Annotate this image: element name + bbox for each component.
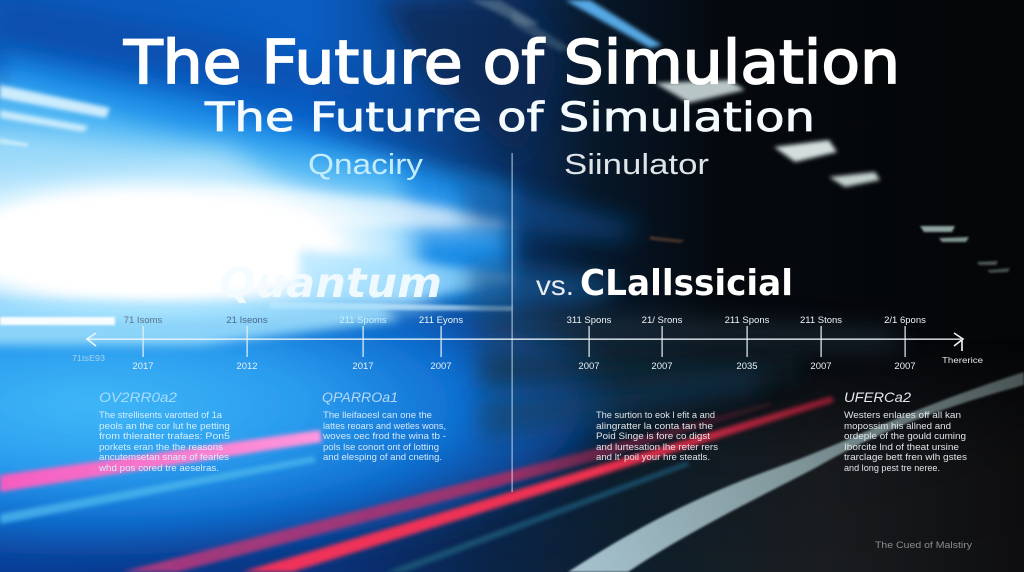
text block: UFERCa2: and long pest tre neree. [844, 463, 940, 474]
timeline labels above: 21/ Srons [642, 315, 683, 326]
timeline labels above: 311 Spons [567, 315, 612, 326]
timeline [72, 315, 983, 372]
timeline labels above: 71 Isoms [124, 315, 163, 326]
text block: OV2RR0a2 [98, 389, 230, 474]
timeline years below: 2007 [810, 361, 832, 372]
text block: QPARROa1: and elesping of and cneting. [323, 452, 442, 463]
timeline years below: 2012 [236, 361, 258, 372]
text block: QPARROa1: pols lse conort ont of lotting [323, 442, 439, 453]
text block: UFERCa2: mopossim his allned and [844, 421, 951, 432]
column heading: Qnaciry: Qnaciry [308, 149, 424, 181]
heading: vs. Classical: vs. [536, 270, 574, 301]
timeline end labels: 71tsE93 [72, 353, 105, 363]
text block: right center: alingratter la conta tan the [596, 421, 713, 432]
text block: OV2RR0a2: ancutemsetan snare of fearles [99, 452, 229, 463]
timeline labels above: 211 Stons [800, 315, 842, 326]
timeline labels above: 2/1 6pons [884, 315, 926, 326]
text block: QPARROa1: woves oec frod the wina tb - [322, 431, 446, 442]
timeline years below: 2007 [894, 361, 916, 372]
text block: OV2RR0a2: from thleratter trafaes: Pon5 [99, 431, 230, 442]
text block: UFERCa2: ordeple of the gould cuming [844, 431, 966, 442]
text block: right center [596, 410, 718, 463]
footer credit: The Cued of Malstiry [875, 540, 972, 551]
text block: UFERCa2 [844, 389, 967, 474]
heading: Quantum: Quantum [219, 259, 442, 307]
title: The Future of Simulation [123, 28, 900, 98]
arrow: right [954, 333, 963, 351]
timeline years below [132, 361, 916, 372]
timeline years below: 2017 [352, 361, 374, 372]
timeline ticks [142, 326, 906, 357]
text block: QPARROa1 [322, 389, 446, 463]
timeline years below: 2007 [430, 361, 452, 372]
text block: right center: and lurtesation lhe reter rers [596, 442, 718, 453]
text block: UFERCa2: trarclage bett fren wlh gstes [844, 452, 967, 463]
heading: vs. Classical: CLallssicial [580, 263, 793, 304]
text block: OV2RR0a2: OV2RR0a2 [99, 389, 177, 405]
center divider [511, 153, 514, 492]
text block: OV2RR0a2: The strellisents varotted of 1a [99, 410, 223, 421]
timeline end labels: Thererice [942, 355, 983, 365]
timeline years below: 2007 [651, 361, 673, 372]
text block: QPARROa1: lattes reoars and wetles wons, [323, 421, 446, 432]
timeline labels above: 211 Spoms [339, 315, 387, 326]
text block: UFERCa2: Westers enlares off all kan [844, 410, 961, 421]
text block: UFERCa2: UFERCa2 [844, 389, 911, 405]
timeline labels above: 21 Iseons [226, 315, 268, 326]
timeline years below: 2035 [736, 361, 758, 372]
timeline years below: 2007 [578, 361, 600, 372]
text block: right center: The surtion to eok l efit a and [596, 410, 715, 421]
text block: OV2RR0a2: peols an the cor lut he petting [99, 421, 230, 432]
text block: right center: Poid Singe is fore co digst [596, 431, 710, 442]
timeline labels above: 211 Spons [725, 315, 770, 326]
subtitle: The Futurre of Simulation [204, 95, 815, 141]
timeline labels above [124, 315, 926, 326]
text block: UFERCa2: Iborcite lnd of theat ursine [844, 442, 959, 453]
arrow: left [87, 333, 96, 346]
text block: OV2RR0a2: whd pos cored tre aeselras. [98, 463, 219, 474]
timeline labels above: 211 Eyons [419, 315, 463, 326]
column heading: Siinulator: Siinulator [564, 149, 709, 181]
timeline end labels [72, 353, 983, 365]
text block: QPARROa1: QPARROa1 [322, 389, 398, 405]
timeline years below: 2017 [132, 361, 154, 372]
text block: OV2RR0a2: porkets eran the the reasons [99, 442, 223, 453]
text block: QPARROa1: The lleifaoesl can one the [323, 410, 432, 421]
text block: right center: and lt' poil your hre steatls. [596, 452, 710, 463]
